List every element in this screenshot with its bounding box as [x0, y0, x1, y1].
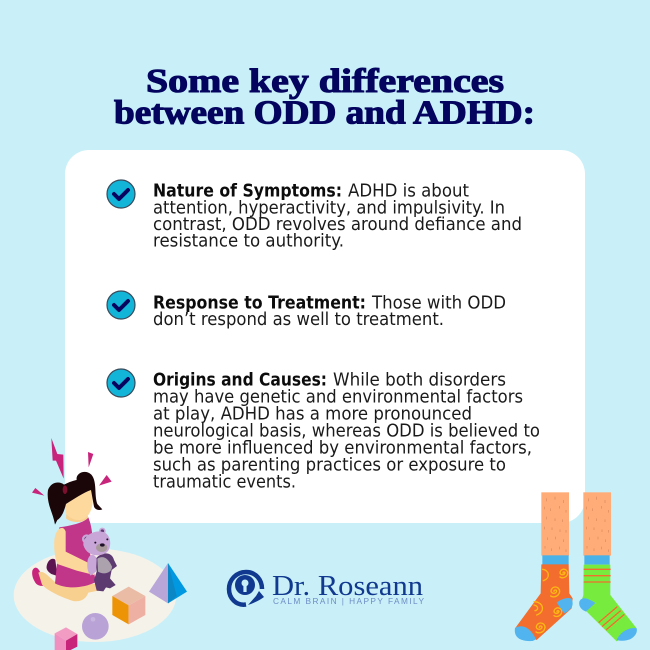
illustration: girl with teddy and toys: [14, 438, 187, 650]
blue pyramid: [149, 563, 187, 603]
text block: origins and causes: at play, ADHD has a more pronounced: [153, 405, 472, 425]
logo: Dr. Roseann: [229, 570, 424, 606]
text block: response to treatment: [153, 293, 506, 330]
text block: nature of symptoms: ADHD is about: [348, 181, 469, 201]
purple ball: [82, 613, 109, 640]
orange cube: [112, 587, 145, 624]
text block: origins and causes: Origins and Causes:: [153, 371, 327, 391]
text block: nature of symptoms: resistance to authority.: [153, 232, 344, 252]
text block: origins and causes: neurological basis, whereas ODD is believed to: [153, 422, 540, 442]
text block: origins and causes: [153, 371, 540, 492]
text block: nature of symptoms: Nature of Symptoms:: [153, 181, 342, 201]
title: [114, 63, 535, 132]
icon: check 3: [107, 369, 135, 397]
logo: Dr. Roseann: Dr. Roseann: [272, 570, 424, 602]
right leg and sock: [579, 492, 637, 641]
panel: white card: [65, 150, 585, 523]
girl: [32, 472, 102, 601]
text block: nature of symptoms: attention, hyperactivity, and impulsivity. In: [153, 198, 505, 218]
illustration: mismatched socks: [515, 492, 637, 641]
teddy bear: [82, 528, 117, 591]
text block: origins and causes: traumatic events.: [153, 472, 296, 492]
title: between ODD and ADHD:: [114, 94, 535, 132]
text block: origins and causes: may have genetic and environmental factors: [153, 388, 523, 408]
logo: Dr. Roseann: CALM BRAIN | HAPPY FAMILY: [273, 596, 424, 606]
icon: check 1: [107, 180, 135, 208]
swirl pattern: [534, 569, 568, 633]
text block: response to treatment: Those with ODD: [371, 293, 506, 313]
text block: origins and causes: While both disorders: [333, 371, 506, 391]
text block: response to treatment: don’t respond as well to treatment.: [153, 310, 444, 330]
left leg and sock: [515, 492, 573, 641]
title: Some key differences: [146, 63, 504, 100]
pink cube: [55, 627, 77, 650]
text block: nature of symptoms: contrast, ODD revolves around defiance and: [153, 215, 522, 235]
text block: response to treatment: Response to Treatment:: [153, 293, 366, 313]
logo icon: [229, 572, 264, 605]
text block: origins and causes: be more influenced by environmental factors,: [153, 439, 532, 459]
icon: lightning and spark marks: [32, 438, 112, 496]
text block: nature of symptoms: [153, 181, 522, 252]
icon: check 2: [107, 291, 135, 319]
text block: origins and causes: such as parenting practices or exposure to: [153, 455, 506, 475]
